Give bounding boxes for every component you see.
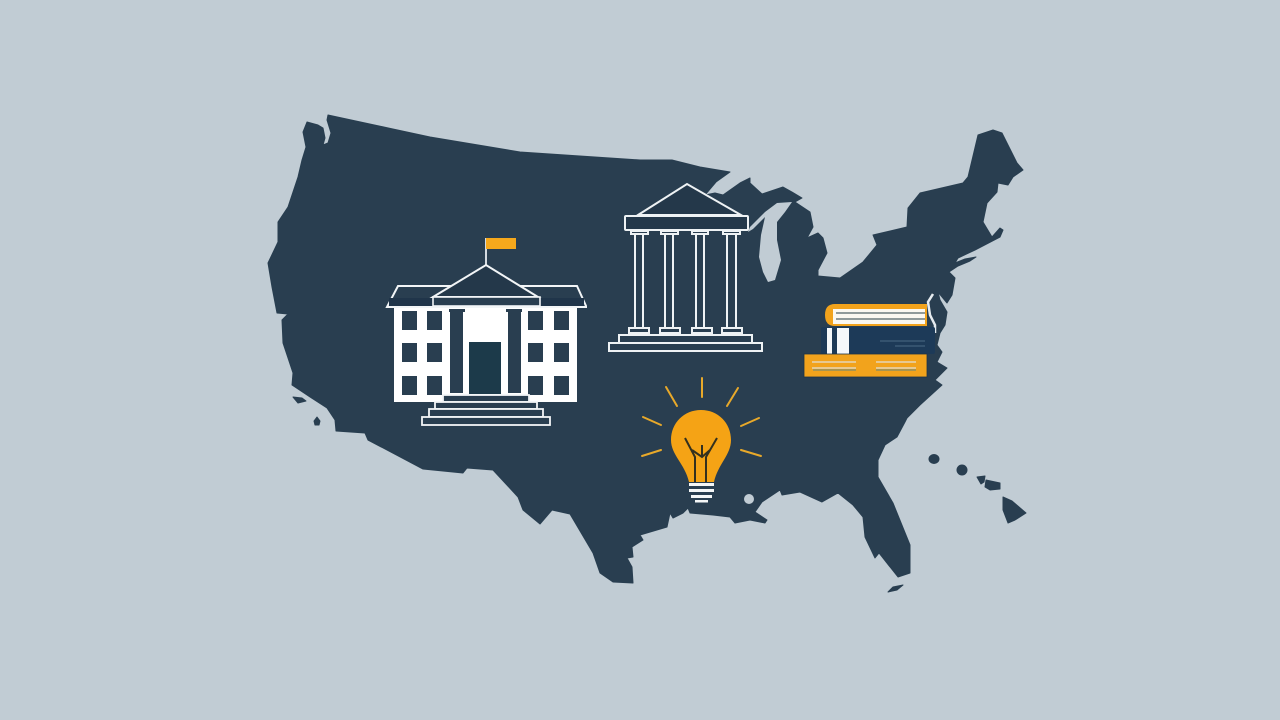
hawaii: big island bbox=[1003, 497, 1026, 523]
rays bbox=[642, 378, 761, 456]
columns bbox=[449, 309, 522, 393]
entablature bbox=[625, 216, 748, 230]
door bbox=[469, 342, 501, 394]
filament bbox=[685, 438, 717, 482]
bulb glass bbox=[671, 410, 731, 482]
hawaii: molokai bbox=[977, 476, 985, 484]
bulb base bbox=[689, 483, 714, 502]
middle book bbox=[821, 327, 935, 354]
hawaii: maui bbox=[985, 480, 1000, 490]
side roofs bbox=[387, 286, 586, 307]
lake michigan bbox=[748, 202, 792, 282]
columns bbox=[635, 234, 736, 328]
entablature bbox=[433, 297, 540, 306]
capitals bbox=[631, 231, 740, 234]
hawaii: oahu bbox=[957, 465, 967, 475]
chesapeake bay line bbox=[928, 294, 935, 333]
top book bbox=[825, 304, 927, 326]
hawaii: kauai bbox=[929, 454, 939, 464]
pediment bbox=[638, 184, 741, 215]
roof band bbox=[389, 298, 584, 306]
icon: light bulb bbox=[642, 378, 761, 502]
flag bbox=[486, 238, 516, 265]
icon: classical temple bbox=[609, 184, 762, 351]
steps bbox=[422, 395, 550, 425]
icon: books stack bbox=[804, 304, 935, 377]
san clemente island bbox=[314, 417, 320, 425]
icon: capitol building bbox=[387, 238, 586, 425]
mainland bbox=[268, 115, 1023, 583]
windows bbox=[402, 311, 569, 395]
lake pontchartrain bbox=[744, 494, 754, 504]
florida keys bbox=[888, 585, 903, 592]
building body bbox=[394, 305, 577, 402]
bottom book bbox=[804, 354, 927, 377]
steps bbox=[619, 335, 752, 343]
channel islands bbox=[293, 397, 306, 403]
map: United States silhouette bbox=[268, 115, 1026, 592]
pediment bbox=[433, 265, 538, 297]
bases bbox=[629, 328, 742, 333]
